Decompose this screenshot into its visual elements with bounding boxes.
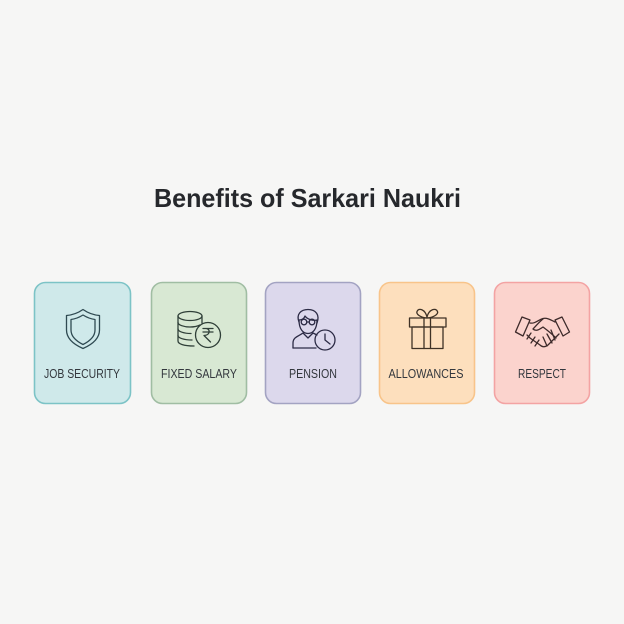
label: ALLOWANCES <box>388 367 464 381</box>
panel: respect <box>494 282 590 404</box>
panel: fixed salary <box>152 282 246 404</box>
icon: gift box <box>410 309 446 348</box>
title: Benefits of Sarkari Naukri <box>154 183 461 213</box>
panel: job security <box>34 282 130 404</box>
label: RESPECT <box>518 367 566 381</box>
icon: coins with rupee <box>178 312 220 348</box>
label: FIXED SALARY <box>161 367 238 381</box>
label: JOB SECURITY <box>44 367 121 381</box>
label: PENSION <box>289 367 337 381</box>
icon: shield <box>66 310 100 348</box>
icon: handshake <box>516 317 570 347</box>
panel: pension <box>266 282 360 404</box>
panel: allowances <box>380 282 474 404</box>
icon: person with clock <box>293 310 335 350</box>
